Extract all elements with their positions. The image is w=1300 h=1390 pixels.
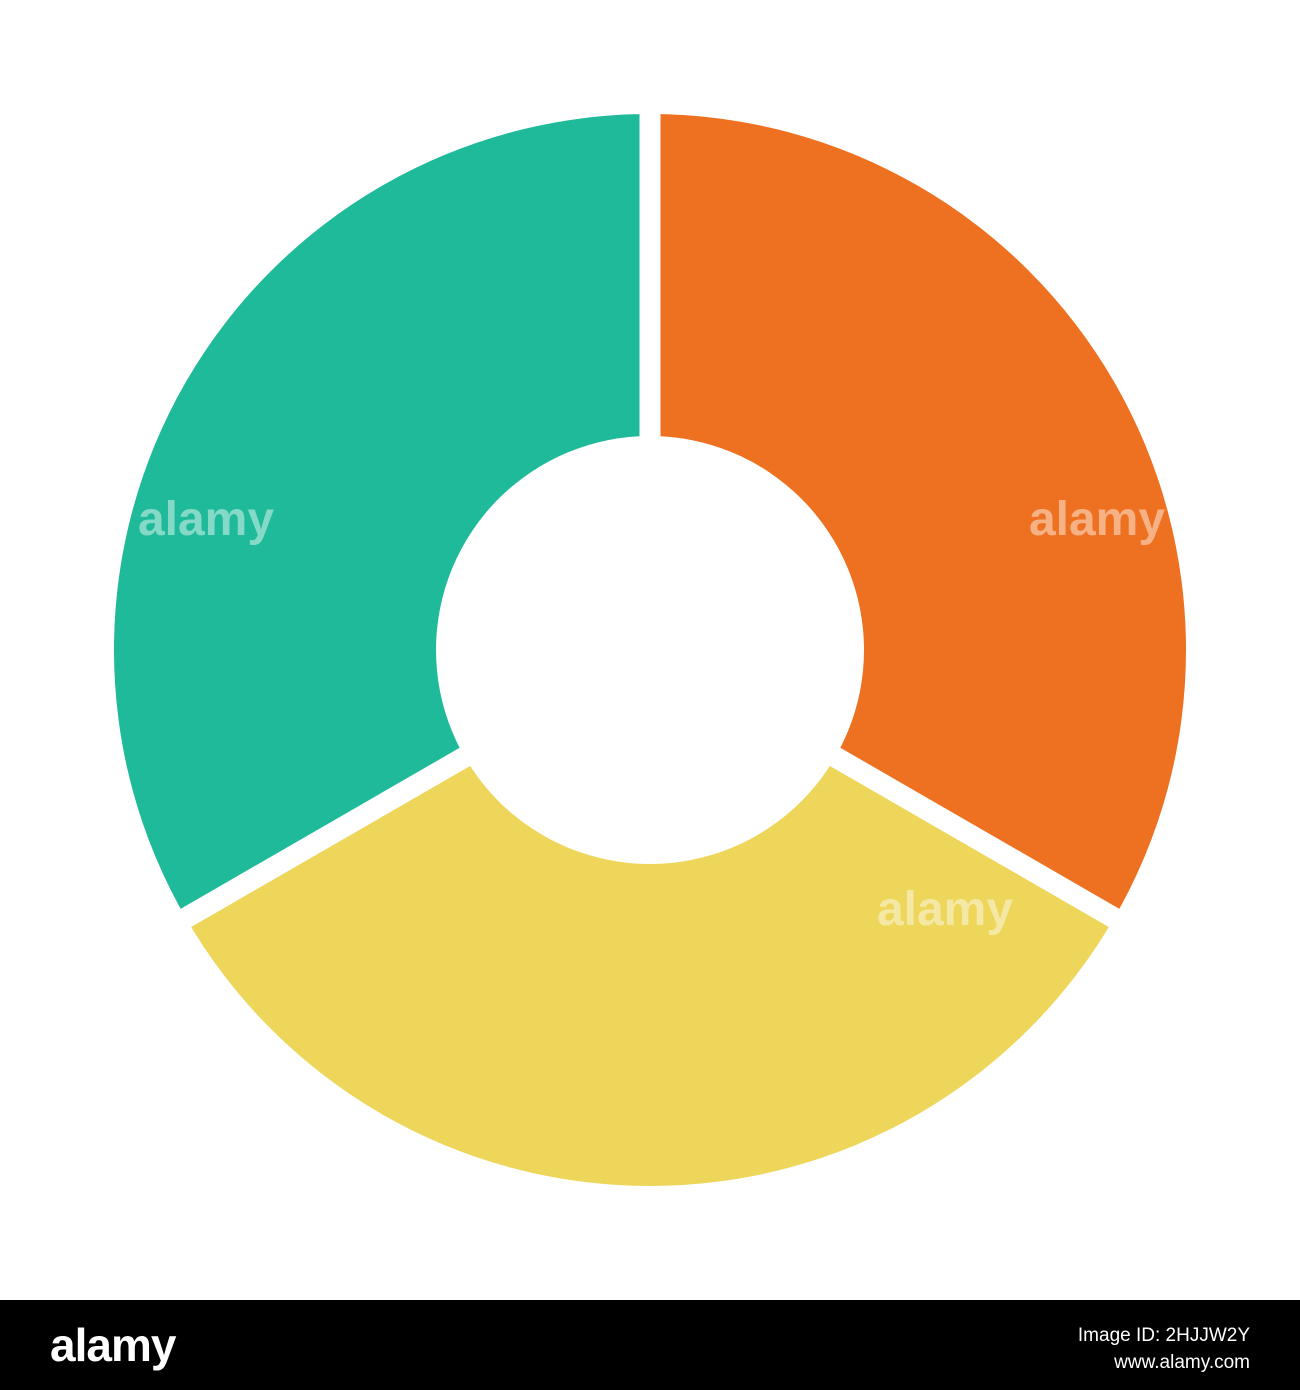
footer meta text: Image ID: 2HJJW2Y (1078, 1325, 1250, 1346)
segment: yellow (186, 650, 1114, 1186)
segment gaps (165, 90, 1135, 930)
footer logo: alamy (50, 1319, 175, 1371)
watermarks (138, 493, 1165, 936)
segment: orange (650, 114, 1186, 918)
watermarks: alamy (1029, 493, 1165, 546)
watermarks: alamy (877, 883, 1013, 936)
footer meta text: www.alamy.com (1114, 1352, 1250, 1373)
footer meta text (1078, 1325, 1250, 1373)
footer bar (0, 1300, 1300, 1390)
center hole (436, 436, 864, 864)
watermarks: alamy (138, 493, 274, 546)
segment: teal (114, 114, 650, 918)
